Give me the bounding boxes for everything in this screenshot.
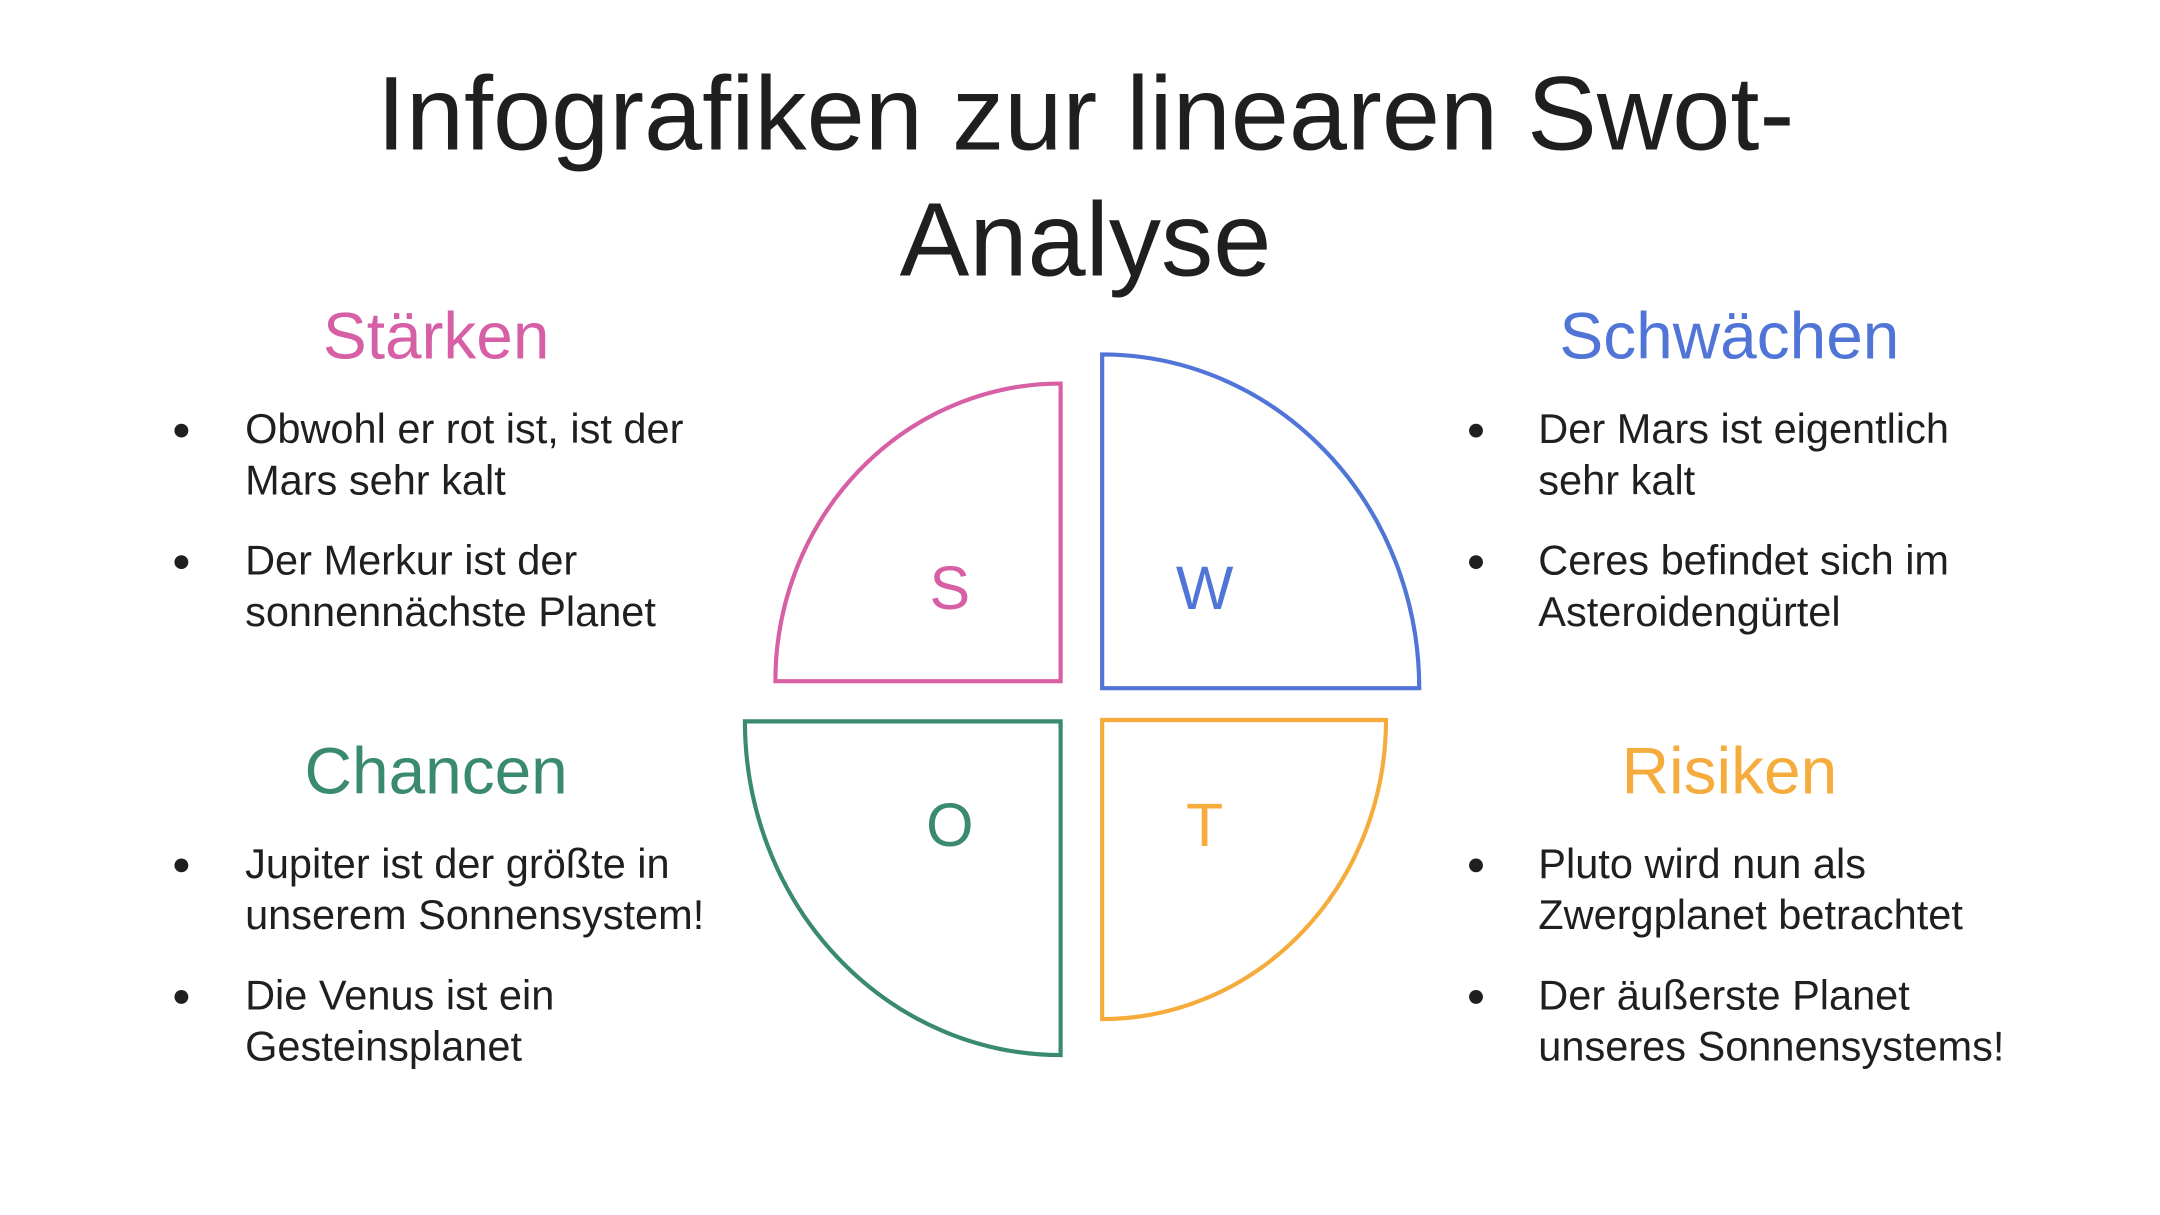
text block: Schwächen bullets: Der Mars ist eigentlich — [1538, 405, 1949, 452]
quadrant: S: S — [930, 554, 970, 622]
quadrant: T — [1102, 720, 1386, 1019]
text block: Risiken bullets: Zwergplanet betrachtet — [1538, 891, 1963, 938]
text block: Risiken bullets: unseres Sonnensystems! — [1538, 1023, 2004, 1070]
text block: Chancen bullets: unserem Sonnensystem! — [245, 891, 704, 938]
text block: Chancen bullets: Die Venus ist ein — [245, 971, 554, 1018]
quadrant: O — [745, 721, 1061, 1055]
text block: Risiken bullets: Pluto wird nun als — [1538, 840, 1866, 887]
quadrant: W — [1102, 354, 1419, 688]
quadrant: W: W — [1176, 554, 1234, 622]
text block: Stärken bullets: Der Merkur ist der — [245, 537, 577, 584]
quadrant: S — [775, 384, 1061, 681]
title: Analyse — [900, 182, 1271, 299]
title: Infografiken zur linearen Swot- — [377, 56, 1794, 173]
text block: Schwächen bullets: Ceres befindet sich im — [1538, 537, 1949, 584]
text block: Chancen bullets: Gesteinsplanet — [245, 1023, 522, 1070]
text block: Chancen bullets: Jupiter ist der größte in — [245, 840, 670, 887]
title — [377, 56, 1794, 299]
quadrant: O: O — [926, 791, 974, 859]
text block: Stärken bullets: Mars sehr kalt — [245, 456, 506, 503]
heading: Risiken: Risiken — [1622, 733, 1837, 807]
quadrant: T: T — [1186, 791, 1223, 859]
heading: Chancen: Chancen — [305, 733, 568, 807]
text block: Schwächen bullets — [1469, 405, 1949, 635]
text block: Stärken bullets: sonnennächste Planet — [245, 588, 656, 635]
text block: Stärken bullets: Obwohl er rot ist, ist der — [245, 405, 684, 452]
heading: Stärken: Stärken — [323, 299, 549, 373]
text block: Schwächen bullets: sehr kalt — [1538, 456, 1696, 503]
text block: Chancen bullets — [174, 840, 704, 1070]
text block: Stärken bullets — [174, 405, 684, 635]
text block: Risiken bullets — [1469, 840, 2004, 1070]
heading: Schwächen: Schwächen — [1559, 299, 1899, 373]
text block: Schwächen bullets: Asteroidengürtel — [1538, 588, 1841, 635]
text block: Risiken bullets: Der äußerste Planet — [1538, 971, 1910, 1018]
